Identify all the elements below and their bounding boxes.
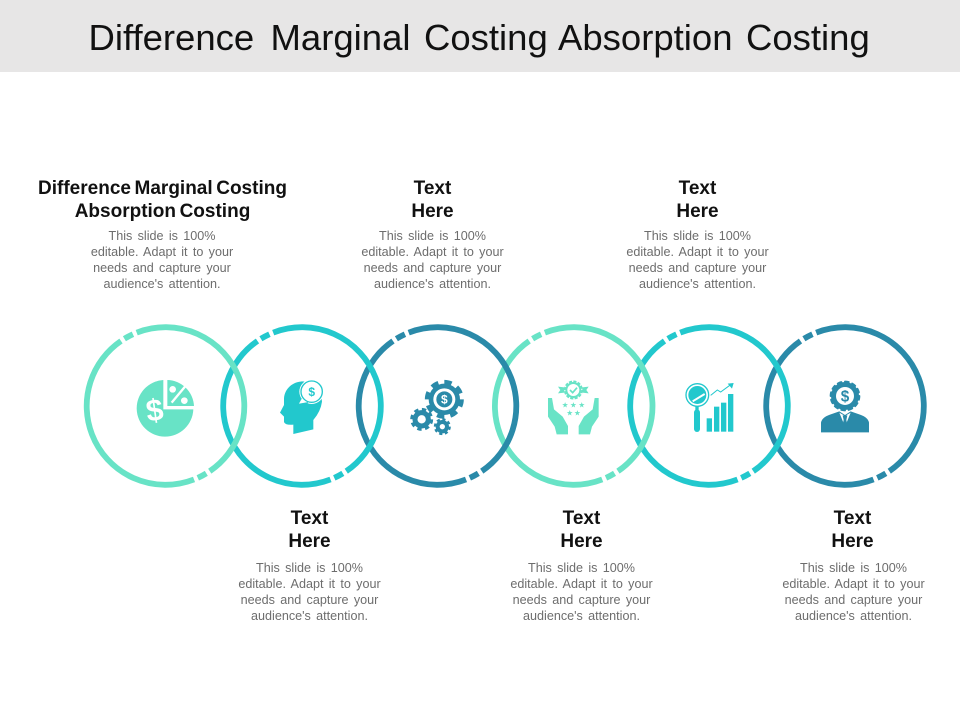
text block 1: audience's attention.	[104, 277, 220, 291]
text block 5: Here	[676, 201, 719, 222]
text block 4: This slide is 100%	[528, 561, 635, 575]
icon: hands holding rating badge: ★	[566, 408, 573, 417]
text block 5: This slide is 100%	[644, 229, 751, 243]
text block 4: Here	[560, 531, 603, 552]
icon: hands holding rating badge: ★	[574, 408, 581, 417]
ring 6	[743, 304, 947, 508]
text block 5: Text	[679, 178, 717, 199]
text block 4: audience's attention.	[523, 609, 640, 623]
ring 5	[607, 304, 811, 508]
text block 6: This slide is 100%	[800, 561, 907, 575]
text block 6: editable. Adapt it to your	[782, 577, 925, 591]
icon: hands holding rating badge: ★	[570, 401, 577, 410]
icon: pie chart with dollar: $	[144, 393, 165, 429]
title: Absorption	[558, 17, 732, 58]
text block 6: Here	[831, 531, 874, 552]
text block 1	[38, 178, 287, 291]
icon: gears with dollar	[412, 382, 462, 434]
text block 4: Text	[563, 508, 601, 529]
title: Costing	[746, 17, 870, 58]
text block 3: Text	[414, 178, 452, 199]
text block 2	[238, 508, 381, 623]
ring 1	[64, 304, 267, 508]
text block 4	[510, 508, 653, 623]
text block 5: editable. Adapt it to your	[626, 245, 769, 259]
ring 4	[472, 304, 676, 508]
icon: pie chart with dollar	[137, 380, 194, 437]
icon: businessman with dollar badge	[821, 382, 869, 432]
text block 1: editable. Adapt it to your	[91, 245, 233, 259]
text block 3: needs and capture your	[364, 261, 501, 275]
text block 4: editable. Adapt it to your	[510, 577, 653, 591]
text block 3: This slide is 100%	[379, 229, 486, 243]
text block 2: This slide is 100%	[256, 561, 363, 575]
title: Difference	[88, 17, 254, 58]
text block 5: needs and capture your	[629, 261, 766, 275]
text block 6	[782, 508, 925, 623]
icon: gears with dollar: $	[441, 393, 448, 407]
title: Costing	[424, 17, 548, 58]
text block 6: Text	[834, 508, 872, 529]
text block 3: audience's attention.	[374, 277, 491, 291]
ring 2	[200, 304, 404, 508]
icon: businessman with dollar badge: $	[841, 389, 850, 406]
icon: hands holding rating badge: ★	[578, 401, 585, 410]
text block 2: Here	[288, 531, 331, 552]
text block 1: Difference Marginal Costing	[38, 178, 287, 199]
icon: magnifier and rising bar chart	[686, 383, 734, 432]
text block 5	[626, 178, 769, 291]
text block 3	[361, 178, 504, 291]
text block 2: Text	[291, 508, 329, 529]
text block 1: Absorption Costing	[75, 201, 250, 222]
text block 1: needs and capture your	[93, 261, 231, 275]
text block 2: editable. Adapt it to your	[238, 577, 381, 591]
text block 2: needs and capture your	[241, 593, 378, 607]
text block 3: editable. Adapt it to your	[361, 245, 504, 259]
text block 4: needs and capture your	[513, 593, 650, 607]
text block 1: This slide is 100%	[109, 229, 215, 243]
text block 2: audience's attention.	[251, 609, 368, 623]
text block 3: Here	[411, 201, 454, 222]
icon: head with dollar speech bubble	[280, 379, 324, 434]
text block 5: audience's attention.	[639, 277, 756, 291]
ring 3	[336, 304, 539, 508]
icon: hands holding rating badge: ★	[562, 401, 568, 410]
title: Marginal	[270, 17, 410, 58]
text block 6: audience's attention.	[795, 609, 912, 623]
title banner	[0, 0, 960, 72]
text block 6: needs and capture your	[785, 593, 922, 607]
icon: hands holding rating badge	[548, 381, 599, 434]
icon: head with dollar speech bubble: $	[308, 385, 315, 399]
